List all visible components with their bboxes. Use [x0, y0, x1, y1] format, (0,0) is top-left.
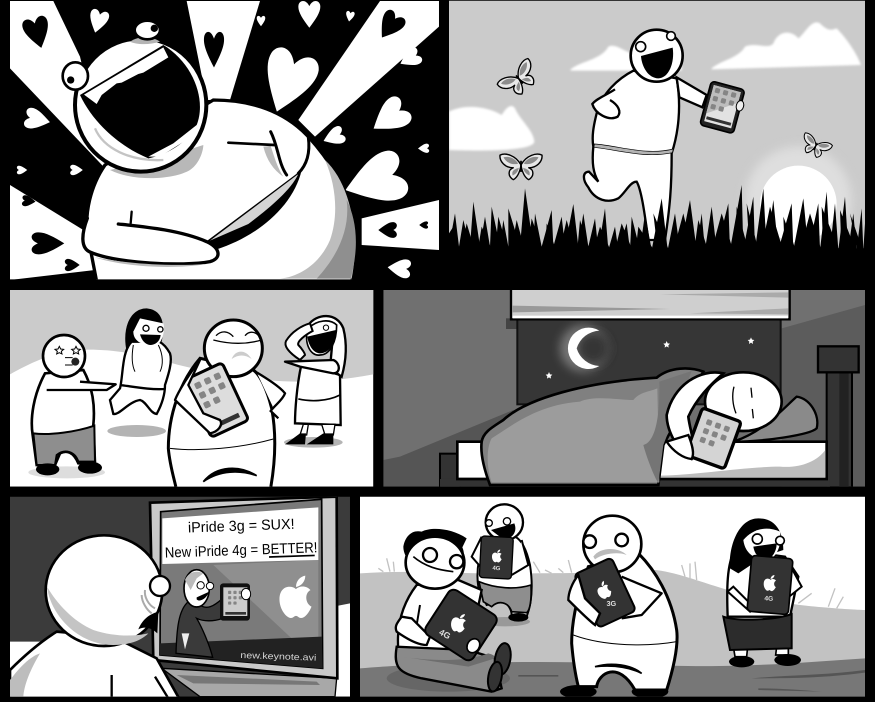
big 4G tablet [423, 587, 499, 663]
grass dense second layer [449, 204, 858, 248]
smug character with tablet [168, 320, 285, 492]
blonde woman pointing [285, 316, 346, 444]
crescent moon [560, 325, 610, 372]
happy head [631, 30, 683, 82]
tablet held in hand [700, 81, 748, 134]
apple logo [279, 576, 311, 618]
night window [517, 318, 781, 404]
blanket [481, 368, 703, 485]
running character [584, 71, 707, 240]
tablet seen edge-on [206, 170, 302, 249]
sky [449, 0, 865, 248]
panel: joyful character hugging tablet with hearts [10, 1, 439, 282]
3G tablet: 3G [606, 599, 617, 608]
hand over tablet edge [667, 435, 693, 459]
bed frame and mattress [440, 442, 830, 490]
grass silhouette [452, 185, 865, 248]
sleeping head [705, 372, 782, 431]
bed post [818, 346, 859, 487]
keynote banner text: New iPride 4g = BETTER! [165, 540, 318, 562]
jumping woman covering mouth [110, 308, 171, 414]
character body [87, 100, 356, 282]
clouds [449, 22, 861, 151]
file name caption: new.keynote.avi [240, 650, 316, 663]
black hearts [21, 8, 428, 271]
window blind [511, 288, 790, 319]
small figure behind [472, 504, 532, 626]
tablet being held up [185, 363, 249, 437]
panel: bystanders pointing at tablet owner [10, 290, 373, 492]
small figure behind: 4G [492, 566, 501, 572]
white hearts [17, 1, 429, 279]
pillow [733, 397, 817, 442]
butterflies [497, 58, 833, 180]
girl's 4G tablet [747, 555, 793, 615]
keynote banner text [162, 507, 318, 564]
seated man with big 4G tablet [387, 529, 513, 693]
pointing boy with star eyes [32, 335, 116, 475]
arm hugging tablet [667, 372, 723, 459]
solid grass base [838, 248, 864, 250]
presenter with tablet [176, 570, 251, 657]
background light rays [10, 1, 439, 280]
sad center figure [560, 516, 677, 698]
girl with 4G tablet [723, 518, 802, 667]
panel: new keynote on the laptop [10, 497, 350, 700]
panel: running through meadow with tablet [449, 0, 865, 248]
panel: everyone else has a 4G tablet [360, 497, 865, 698]
keynote banner text: iPride 3g = SUX! [188, 517, 295, 536]
laughing head with huge mouth [75, 38, 206, 172]
sun [745, 147, 852, 253]
shadows [28, 425, 343, 478]
tablet in bed [685, 408, 741, 469]
sad figure arm [568, 575, 600, 625]
outdoor background [360, 497, 865, 697]
big 4G tablet: 4G [437, 627, 453, 641]
panel: sleeping with tablet at night [383, 288, 865, 490]
hugging arms [83, 132, 309, 267]
laptop [150, 497, 337, 697]
stars [546, 337, 754, 379]
arm cradling tablet [175, 360, 221, 433]
girl's 4G tablet: 4G [764, 595, 773, 603]
bulging eyes [63, 21, 160, 90]
3G tablet [574, 557, 636, 628]
bedroom walls [383, 290, 865, 487]
room background [10, 497, 350, 697]
viewer from behind [10, 535, 180, 700]
ground and backdrop [10, 290, 373, 487]
